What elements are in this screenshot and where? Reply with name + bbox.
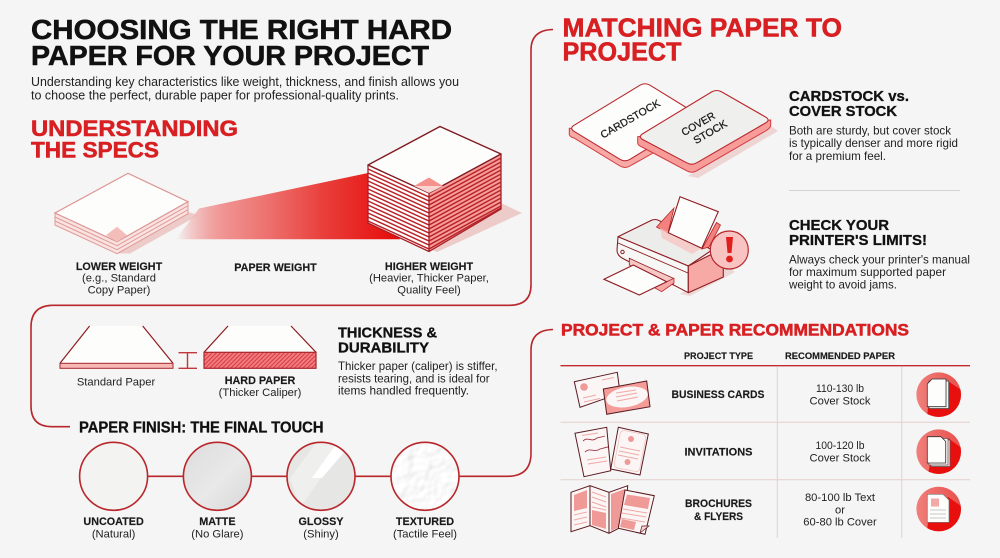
- label: hard paper: HARD PAPER: [225, 375, 295, 387]
- text block: cardstock vs cover stock: COVER STOCK: [789, 103, 897, 120]
- icon: printer with alert: [604, 197, 748, 296]
- label: higher weight: [369, 261, 489, 296]
- label: brochures and flyers: [685, 498, 752, 523]
- icon: paper badge 1: [916, 372, 961, 417]
- label: cover stock: [679, 110, 730, 147]
- table: [560, 351, 970, 540]
- label: matte: [191, 516, 244, 540]
- title: [31, 14, 452, 71]
- paper supports: [656, 208, 674, 233]
- printer front: [617, 237, 688, 293]
- finish swatch: matte: [183, 442, 251, 510]
- recommended paper: brochures and flyers: [803, 492, 877, 529]
- heading: matching paper to project: [562, 13, 842, 67]
- label: hard paper: [219, 375, 302, 399]
- text block: printer limits: for maximum supported paper: [789, 265, 946, 279]
- label: higher weight: Quality Feel): [397, 284, 461, 296]
- icon: paper badge 2: [916, 429, 961, 474]
- text block: printer limits: CHECK YOUR: [789, 217, 889, 234]
- label: paper weight: PAPER WEIGHT: [234, 262, 317, 274]
- finish connector line: [148, 475, 391, 477]
- icon: caliper measure: [178, 353, 197, 368]
- icon: cardstock and cover stock: [569, 84, 778, 178]
- recommended paper: invitations: [810, 440, 871, 465]
- connector line: finish to recommendations: [459, 330, 553, 476]
- label: brochures and flyers: & FLYERS: [694, 511, 743, 523]
- alert badge: [710, 231, 748, 269]
- recommended paper: business cards: 110-130 lb: [816, 383, 864, 395]
- paper slot and tray: [629, 258, 673, 285]
- text block: printer limits: PRINTER'S LIMITS!: [789, 232, 927, 249]
- label: uncoated: [83, 516, 144, 540]
- text block: cardstock vs cover stock: for a premium feel.: [789, 149, 886, 163]
- label: matte: MATTE: [199, 516, 236, 528]
- label: uncoated: (Natural): [92, 528, 136, 540]
- output paper: [604, 265, 667, 295]
- label: glossy: [298, 516, 344, 540]
- text block: thickness and durability: resists tearing, and is ideal for: [338, 371, 490, 385]
- recommended paper: business cards: Cover Stock: [810, 395, 871, 407]
- label: glossy: GLOSSY: [298, 516, 344, 528]
- recommended paper: brochures and flyers: 60-80 lb Cover: [803, 517, 877, 529]
- text block: thickness and durability: [338, 325, 498, 397]
- label: higher weight: (Heavier, Thicker Paper,: [369, 273, 489, 285]
- label: hard paper: (Thicker Caliper): [219, 387, 302, 399]
- recommended paper: brochures and flyers: or: [835, 504, 845, 516]
- icon: paper badge 3: [916, 486, 961, 532]
- heading: understanding the specs: [31, 116, 238, 163]
- label: cover stock: COVER: [679, 110, 718, 139]
- title: CHOOSING THE RIGHT HARD: [31, 14, 452, 45]
- title: PAPER FOR YOUR PROJECT: [31, 40, 429, 71]
- printer top face: [618, 220, 712, 266]
- heading: project and paper recommendations: PROJECT & PAPER RECOMMENDATIONS: [561, 321, 909, 340]
- icon: business cards: [574, 372, 650, 414]
- divider: [789, 190, 960, 192]
- icon: invitations: [575, 427, 648, 477]
- label: standard paper: Standard Paper: [77, 376, 155, 388]
- icon: high weight paper stack: [368, 126, 522, 252]
- paper weight wedge: [176, 173, 400, 239]
- heading: paper finish: PAPER FINISH: THE FINAL TOUCH: [79, 419, 324, 436]
- heading: understanding the specs: UNDERSTANDING: [31, 116, 238, 141]
- label: lower weight: LOWER WEIGHT: [76, 261, 163, 273]
- text block: cardstock vs cover stock: CARDSTOCK vs.: [789, 88, 909, 105]
- label: invitations: INVITATIONS: [684, 447, 752, 459]
- intro text: to choose the perfect, durable paper for professional-quality prints.: [31, 87, 399, 102]
- label: cover stock: STOCK: [691, 118, 730, 147]
- text block: cardstock vs cover stock: Both are sturdy, but cover stock: [789, 124, 952, 138]
- text block: printer limits: Always check your printer's manual: [789, 252, 970, 266]
- recommended paper: invitations: 100-120 lb: [816, 440, 864, 452]
- finish swatch: uncoated: [80, 442, 148, 510]
- label: lower weight: [76, 261, 163, 296]
- text block: printer limits: weight to avoid jams.: [788, 278, 897, 292]
- label: textured: (Tactile Feel): [393, 528, 457, 540]
- connector line: specs to matching panel: [31, 30, 553, 427]
- text block: cardstock vs cover stock: [789, 88, 958, 163]
- label: textured: [393, 516, 457, 540]
- column header: project type: PROJECT TYPE: [684, 351, 753, 362]
- recommended paper: business cards: [810, 383, 871, 407]
- printer side: [688, 255, 723, 293]
- alert mark: [726, 237, 733, 262]
- label: glossy: (Shiny): [303, 528, 339, 540]
- text block: thickness and durability: Thicker paper (caliper) is stiffer,: [338, 359, 498, 373]
- recommended paper: invitations: Cover Stock: [810, 453, 871, 465]
- intro text: Understanding key characteristics like weight, thickness, and finish allows you: [31, 74, 459, 89]
- text block: printer limits: [788, 217, 970, 292]
- icon: hard paper cross-section: [204, 326, 316, 368]
- text block: thickness and durability: DURABILITY: [338, 340, 429, 357]
- recommended paper: brochures and flyers: 80-100 lb Text: [805, 492, 876, 504]
- column header: recommended paper: RECOMMENDED PAPER: [785, 351, 895, 362]
- text block: thickness and durability: items handled frequently.: [338, 383, 469, 397]
- heading: understanding the specs: THE SPECS: [31, 138, 159, 163]
- label: matte: (No Glare): [191, 528, 244, 540]
- icon: low weight paper stack: [55, 173, 199, 254]
- label: brochures and flyers: BROCHURES: [685, 498, 752, 510]
- heading: matching paper to project: PROJECT: [562, 37, 682, 67]
- intro text: [31, 74, 459, 102]
- finish swatch: glossy: [287, 442, 355, 510]
- label: business cards: BUSINESS CARDS: [672, 389, 764, 401]
- text block: thickness and durability: THICKNESS &: [338, 325, 437, 342]
- label: uncoated: UNCOATED: [83, 516, 144, 528]
- label: textured: TEXTURED: [396, 516, 454, 528]
- label: lower weight: (e.g., Standard: [82, 273, 156, 285]
- label: lower weight: Copy Paper): [88, 284, 151, 296]
- text block: cardstock vs cover stock: is typically denser and more rigid: [789, 136, 958, 150]
- finish swatch: textured: [391, 442, 459, 511]
- input paper: [668, 197, 718, 248]
- table rules: [560, 366, 970, 538]
- label: higher weight: HIGHER WEIGHT: [385, 261, 473, 273]
- heading: matching paper to project: MATCHING PAPER TO: [562, 13, 842, 43]
- icon: standard paper cross-section: [60, 326, 173, 368]
- icon: brochures and flyers: [571, 486, 654, 534]
- label: cardstock: CARDSTOCK: [598, 97, 663, 141]
